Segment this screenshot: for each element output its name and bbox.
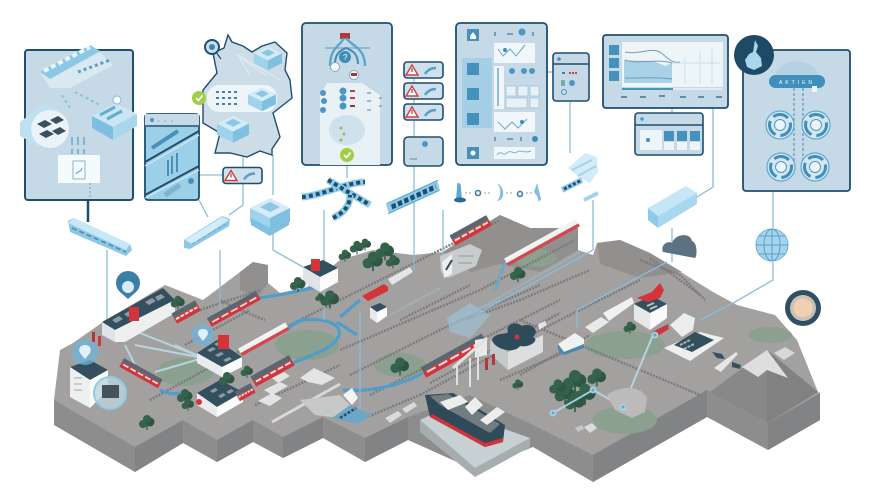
panel: control dashboard <box>456 23 547 165</box>
data table <box>320 83 380 165</box>
top/bottom controls <box>495 32 533 36</box>
cloud button <box>769 62 825 88</box>
panel: switch diagnostics: ? <box>343 53 348 62</box>
document card <box>58 155 100 183</box>
forest sensor line <box>550 332 658 416</box>
depot building <box>102 288 175 342</box>
factory cluster <box>652 313 724 361</box>
light beams <box>120 325 653 413</box>
status band <box>207 85 277 112</box>
blue rail routes <box>160 262 505 394</box>
panel: track view <box>145 114 199 200</box>
magnified train detail <box>20 103 60 146</box>
land top surface <box>54 215 820 455</box>
pale light tracks <box>390 252 580 322</box>
pin: blue location <box>116 271 140 299</box>
green check <box>340 148 354 162</box>
isometric train maintenance bay <box>40 45 100 79</box>
icon: red train <box>340 33 350 39</box>
white tower and flags <box>453 338 495 387</box>
icon: stacked building <box>250 198 290 236</box>
figures row <box>454 183 541 202</box>
upper station complex <box>440 244 482 278</box>
data card <box>494 66 504 109</box>
map site icons <box>254 46 282 70</box>
ship <box>425 393 505 447</box>
location pin <box>205 40 221 59</box>
lower depot <box>196 380 243 417</box>
map: Germany <box>192 35 292 157</box>
freight train <box>558 297 634 355</box>
land side faces <box>54 380 820 482</box>
panel: track view: • • • <box>158 118 174 123</box>
alert: track warning <box>223 168 262 184</box>
alerts column <box>404 62 443 78</box>
panel: switch diagnostics <box>302 23 392 165</box>
icon: train 1 <box>68 218 132 256</box>
line charts <box>494 43 535 63</box>
icon: platform <box>562 153 598 200</box>
magnifier lens <box>94 377 126 409</box>
mountain <box>710 347 818 423</box>
panel: actions <box>743 50 850 191</box>
alert 3 <box>404 104 443 120</box>
road vehicles <box>575 423 597 433</box>
panel: mini status <box>553 53 589 101</box>
green check badge <box>192 91 206 105</box>
connection wires <box>107 72 773 410</box>
wind and aircraft <box>712 352 741 372</box>
panel: maintenance depot <box>20 45 137 222</box>
worker <box>454 183 466 202</box>
freight locomotive <box>362 267 413 301</box>
rock mounds <box>240 215 682 297</box>
blue signal patch <box>447 303 490 338</box>
alert 2 <box>404 83 443 99</box>
freight wagons <box>385 402 417 423</box>
round factory <box>490 321 547 370</box>
small station <box>303 259 338 292</box>
icon: rail crossing <box>302 180 370 218</box>
small signal house <box>370 303 387 323</box>
landscape base <box>54 215 820 482</box>
warehouse icon <box>92 103 137 127</box>
panel: mini indicators <box>635 113 703 155</box>
icon: train 2 <box>184 216 230 249</box>
right-side depot <box>634 283 667 330</box>
badge: sun <box>785 290 821 326</box>
icon: dark cloud <box>662 235 697 258</box>
badge: region map <box>734 35 774 75</box>
junction with pale field <box>332 405 372 424</box>
rail tracks <box>150 220 705 420</box>
trees <box>139 239 636 430</box>
dock <box>420 408 530 477</box>
question node <box>339 51 351 63</box>
icon: server block <box>648 186 697 228</box>
pale cloud <box>607 388 647 418</box>
green fields <box>157 249 792 434</box>
trains on network <box>119 215 580 401</box>
timeline <box>622 88 673 90</box>
alert 1 <box>404 62 443 78</box>
icon: rail section <box>384 180 442 214</box>
central station <box>192 324 242 377</box>
forest <box>549 368 606 412</box>
sidebar buttons <box>609 45 619 81</box>
panel: trend chart screen <box>603 35 728 108</box>
status list <box>329 115 365 145</box>
cloud button: AKTIEN <box>779 80 815 86</box>
hospital building <box>70 332 126 409</box>
port buildings <box>258 368 358 422</box>
sensor box <box>404 137 443 166</box>
sidebar icons <box>467 29 479 159</box>
gauges <box>766 111 794 139</box>
icon: globe <box>756 229 788 261</box>
